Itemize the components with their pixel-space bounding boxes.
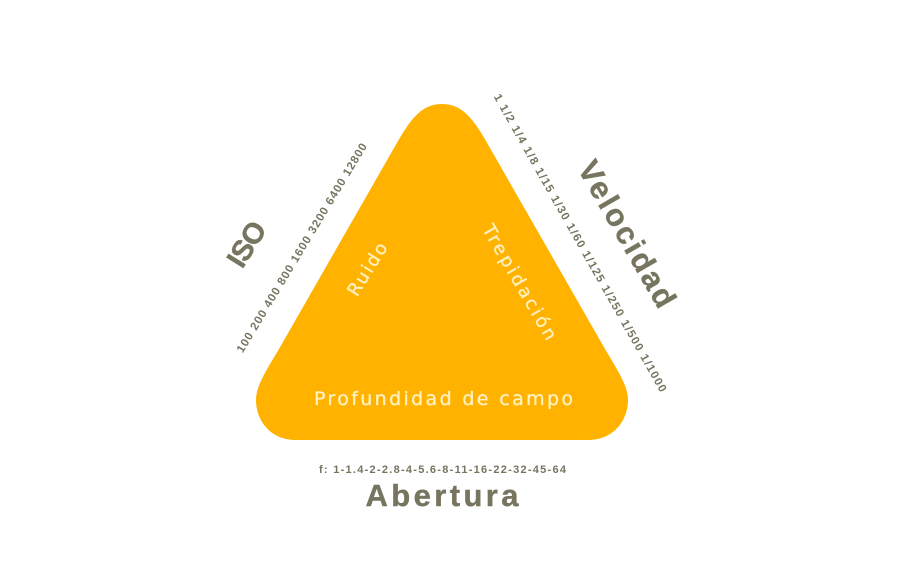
rounded triangle bbox=[256, 104, 628, 440]
label: Ruido: Ruido bbox=[343, 239, 392, 300]
scale: shutter speed values: 1 1/2 1/4 1/8 1/15 1/30 1/60 1/125 1/250 1/500 1/1000 bbox=[491, 92, 668, 394]
heading: Abertura: Abertura bbox=[366, 478, 519, 513]
label: Profundidad de campo: Profundidad de campo bbox=[314, 388, 573, 410]
heading: Velocidad: Velocidad bbox=[571, 154, 683, 314]
scale: ISO values: 100 200 400 800 1600 3200 6400 12800 bbox=[235, 141, 370, 355]
heading: ISO: ISO bbox=[221, 216, 274, 273]
scale: aperture values: f: 1-1.4-2-2.8-4-5.6-8-11-16-22-32-45-64 bbox=[319, 464, 567, 476]
label: Trepidación: Trepidación bbox=[477, 220, 561, 344]
